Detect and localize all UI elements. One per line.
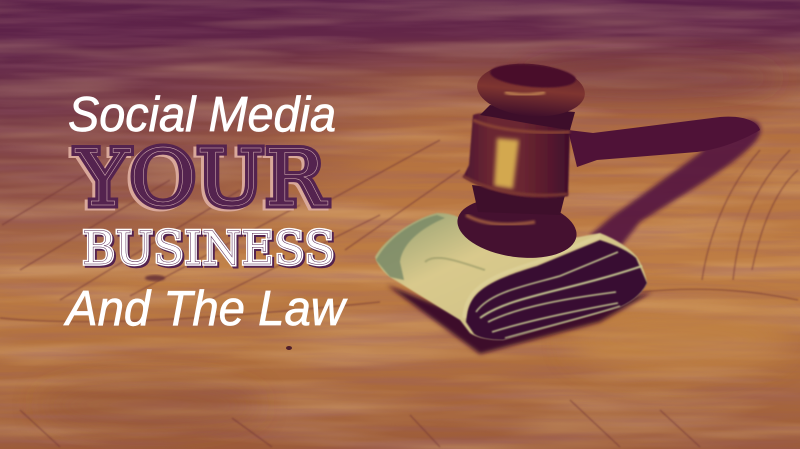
gavel cap <box>475 59 587 130</box>
heading: YOUR: YOUR <box>75 134 328 224</box>
gavel head highlight <box>494 138 519 189</box>
money top bill <box>375 213 647 340</box>
icon: money roll <box>375 213 652 354</box>
money folded edge <box>466 240 647 340</box>
gavel head <box>463 113 570 198</box>
gavel handle <box>568 117 760 167</box>
icon: gavel <box>454 59 760 265</box>
heading: BUSINESS: BUSINESS <box>82 221 335 275</box>
heading: Social Media: Social Media <box>68 88 336 142</box>
icon: gavel shadow <box>590 120 761 250</box>
money shadow <box>387 285 652 354</box>
heading: BUSINESS: BUSINESS <box>84 223 337 277</box>
heading: YOUR: YOUR <box>75 134 328 224</box>
heading: And The Law: And The Law <box>63 282 348 336</box>
gavel base <box>454 185 580 265</box>
heading: BUSINESS: BUSINESS <box>82 221 335 275</box>
heading: YOUR: YOUR <box>72 136 325 226</box>
